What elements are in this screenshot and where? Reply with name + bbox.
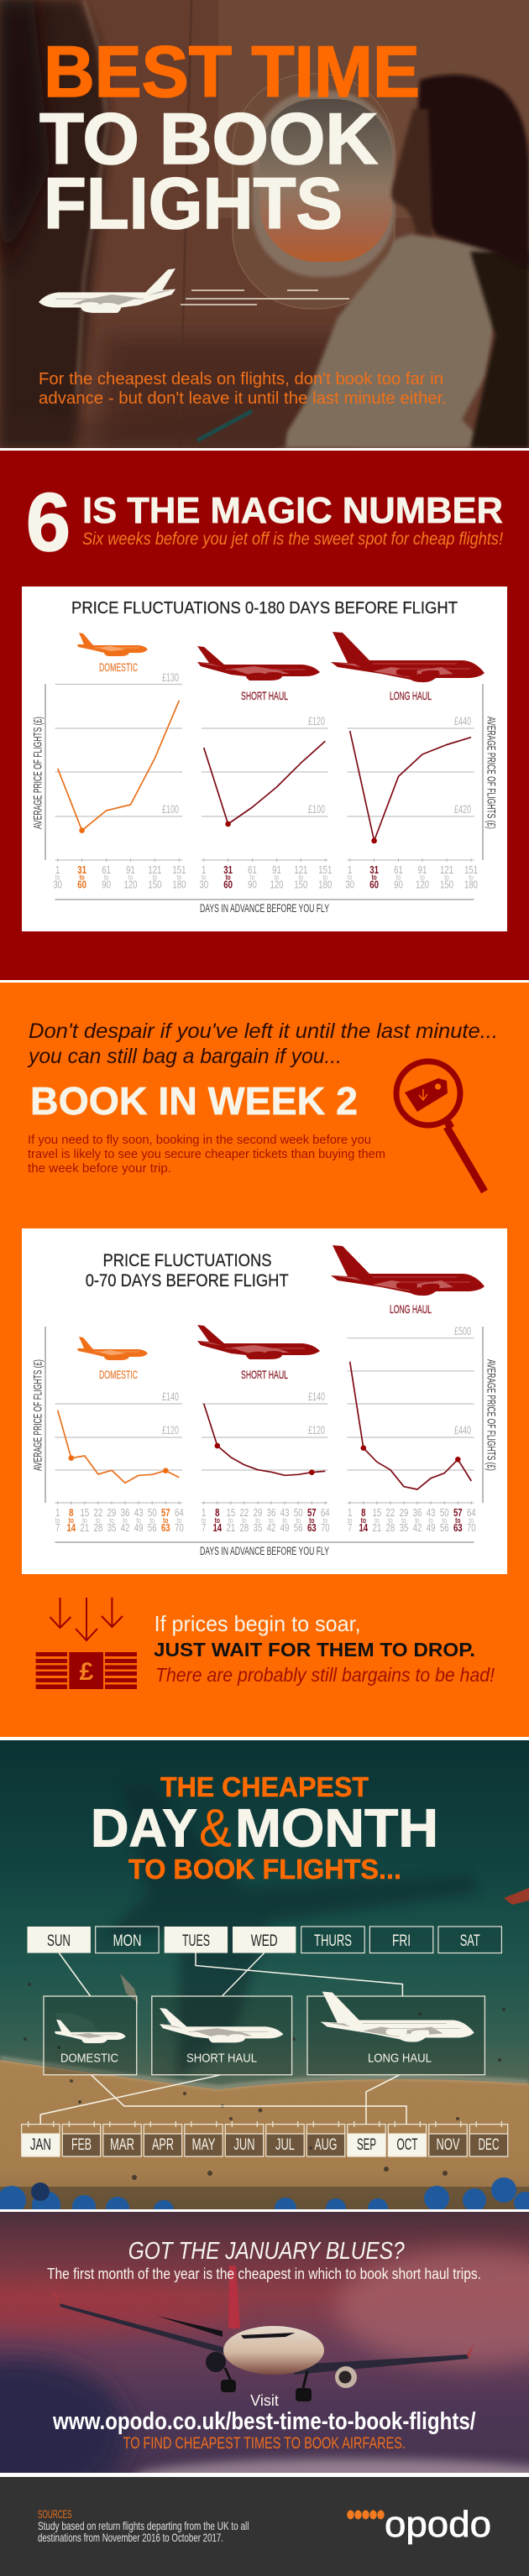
domestic line chart: to — [82, 1516, 87, 1525]
domestic line chart: £140 — [162, 1390, 179, 1403]
short haul line chart: to — [202, 873, 207, 882]
short haul line chart: to — [275, 873, 280, 882]
long haul line chart: to — [469, 873, 474, 882]
icon: speed lines — [181, 290, 349, 305]
long haul line chart: 14 — [359, 1523, 369, 1534]
lead-in text: Don't despair if you've left it until the last minute... — [29, 1019, 498, 1043]
panel: 0-70 day chart — [22, 1228, 507, 1574]
heading: GOT THE JANUARY BLUES? — [128, 2238, 405, 2265]
long haul line chart: 120 — [416, 879, 429, 891]
long haul line chart: 150 — [440, 879, 453, 891]
domestic box: DOMESTIC — [60, 2051, 118, 2065]
domestic line chart: to — [177, 873, 182, 882]
heading: TO BOOK FLIGHTS... — [128, 1854, 401, 1885]
domestic line chart: 8 — [69, 1508, 73, 1519]
short haul line chart: 28 — [240, 1523, 249, 1534]
long haul line chart: £500 — [454, 1325, 471, 1338]
short haul line chart: 43 — [280, 1508, 289, 1519]
domestic line chart: 120 — [123, 879, 138, 891]
domestic line chart: 43 — [134, 1508, 143, 1519]
calendar months: NOV — [437, 2136, 460, 2154]
long haul line chart: 30 — [345, 879, 354, 891]
body text — [28, 1133, 385, 1176]
calendar months: FEB — [71, 2136, 92, 2154]
domestic plane — [77, 1337, 148, 1360]
short haul line chart: 29 — [254, 1508, 262, 1519]
long haul line chart: 42 — [413, 1523, 422, 1534]
title: TO BOOK — [39, 99, 378, 180]
short haul line chart: to — [282, 1516, 287, 1525]
domestic line chart: 90 — [102, 879, 111, 891]
sources: SOURCES — [38, 2507, 72, 2521]
heading — [91, 1771, 438, 1885]
domestic line chart: 56 — [148, 1523, 157, 1534]
axes and axis titles: AVERAGE PRICE OF FLIGHTS (£) — [485, 1359, 497, 1471]
short haul line chart: 30 — [199, 879, 208, 891]
domestic line chart: 29 — [107, 1508, 116, 1519]
short haul line chart: to — [323, 873, 328, 882]
days of the week: TUES — [182, 1932, 210, 1950]
icon: white plane — [39, 269, 175, 313]
domestic line chart: 22 — [94, 1508, 102, 1519]
calendar months — [22, 2121, 508, 2156]
long haul line chart: 7 — [348, 1523, 352, 1534]
long haul line chart: 49 — [427, 1523, 435, 1534]
long haul line chart — [348, 1325, 476, 1534]
long haul line chart: to — [420, 873, 425, 882]
sources: Study based on return flights departing from the UK to all — [38, 2519, 249, 2532]
domestic line chart: 42 — [121, 1523, 129, 1534]
long haul line chart: to — [455, 1516, 461, 1525]
advice text — [154, 1611, 495, 1686]
long haul line chart: to — [428, 1516, 433, 1525]
short haul line chart: 61 — [248, 865, 257, 876]
long haul line chart: 29 — [400, 1508, 408, 1519]
long haul plane — [331, 632, 484, 682]
panel: january blues — [0, 2212, 529, 2473]
short haul line chart: 180 — [318, 879, 332, 891]
domestic line chart: 50 — [148, 1508, 157, 1519]
short haul line chart: £100 — [308, 803, 325, 816]
axes and axis titles: DAYS IN ADVANCE BEFORE YOU FLY — [200, 1545, 329, 1557]
domestic line chart: to — [123, 1516, 128, 1525]
long haul line chart: 64 — [467, 1508, 476, 1519]
days of the week: SAT — [460, 1932, 480, 1950]
short haul line chart: 8 — [215, 1508, 219, 1519]
short haul line chart: £140 — [308, 1390, 325, 1403]
long haul line chart: 121 — [440, 865, 453, 876]
advice text: There are probably still bargains to be had! — [155, 1664, 495, 1686]
domestic line chart: 91 — [126, 865, 135, 876]
body text: the week before your trip. — [28, 1161, 171, 1176]
short haul line chart: to — [242, 1516, 247, 1525]
long haul line chart: 70 — [467, 1523, 476, 1534]
long haul line chart: £440 — [454, 1424, 471, 1437]
calendar months: DEC — [479, 2136, 499, 2154]
domestic line chart: to — [55, 1516, 60, 1525]
domestic line chart: 36 — [121, 1508, 129, 1519]
domestic line chart: to — [149, 1516, 155, 1525]
axes and axis titles: AVERAGE PRICE OF FLIGHTS (£) — [485, 717, 497, 829]
domestic line chart: to — [104, 873, 109, 882]
long haul line chart: to — [444, 873, 449, 882]
icon: falling prices: £ — [80, 1658, 94, 1686]
long haul line chart: to — [388, 1516, 393, 1525]
short haul plane — [197, 646, 320, 681]
short haul line chart: 121 — [294, 865, 307, 876]
short haul line chart: to — [299, 873, 304, 882]
intro text — [39, 370, 447, 408]
short haul line chart: 22 — [240, 1508, 249, 1519]
long haul line chart: to — [442, 1516, 447, 1525]
short haul line chart — [199, 715, 332, 891]
domestic line chart: 31 — [77, 865, 86, 876]
long haul line chart: 15 — [373, 1508, 381, 1519]
axes and axis titles: DAYS IN ADVANCE BEFORE YOU FLY — [200, 902, 329, 915]
long haul line chart: to — [396, 873, 401, 882]
domestic line chart: 49 — [134, 1523, 143, 1534]
panel: footer — [0, 2473, 529, 2576]
long haul line chart: to — [361, 1516, 366, 1525]
short haul line chart: 14 — [212, 1523, 223, 1534]
domestic label: DOMESTIC — [99, 1368, 138, 1381]
long haul line chart: 151 — [464, 865, 478, 876]
domestic line chart: £130 — [162, 671, 179, 684]
domestic line chart: to — [163, 1516, 169, 1525]
domestic line chart: to — [69, 1516, 74, 1525]
calendar months: SEP — [357, 2136, 376, 2154]
axes and axis titles: AVERAGE PRICE OF FLIGHTS (£) — [32, 717, 44, 829]
long haul line chart: 180 — [464, 879, 478, 891]
days of the week: WED — [251, 1932, 278, 1950]
intro text: For the cheapest deals on flights, don't book too far in — [39, 370, 443, 388]
long haul box: LONG HAUL — [368, 2051, 432, 2065]
long haul line chart: 91 — [418, 865, 427, 876]
heading: DAY — [91, 1798, 197, 1859]
short haul line chart: 57 — [307, 1508, 317, 1519]
logo: opodo: opodo — [385, 2504, 491, 2545]
axes and axis titles: AVERAGE PRICE OF FLIGHTS (£) — [32, 1359, 44, 1471]
domestic line chart: 1 — [55, 865, 60, 876]
short haul line chart: to — [228, 1516, 233, 1525]
short haul line chart: 63 — [307, 1523, 317, 1534]
short haul line chart: 35 — [254, 1523, 262, 1534]
long haul line chart: to — [348, 873, 353, 882]
domestic line chart: £100 — [162, 803, 179, 816]
short haul box — [152, 1996, 292, 2075]
long haul line chart: to — [415, 1516, 420, 1525]
domestic line chart: 180 — [172, 879, 186, 891]
domestic plane — [77, 633, 148, 656]
short haul line chart: £120 — [308, 1424, 325, 1437]
short haul line chart: to — [225, 873, 231, 882]
domestic line chart: 14 — [66, 1523, 76, 1534]
domestic line chart: to — [153, 873, 158, 882]
domestic line chart: 28 — [94, 1523, 102, 1534]
long haul line chart: 31 — [369, 865, 379, 876]
short haul line chart: to — [296, 1516, 301, 1525]
domestic line chart: 61 — [102, 865, 111, 876]
panel: six is the magic number — [0, 451, 529, 980]
long haul line chart: to — [371, 873, 377, 882]
short haul box: SHORT HAUL — [186, 2051, 257, 2065]
short haul line chart: 56 — [294, 1523, 303, 1534]
domestic line chart: £120 — [162, 1424, 179, 1437]
panel: hero — [0, 0, 529, 448]
domestic line chart: 35 — [107, 1523, 116, 1534]
advice text: If prices begin to soar, — [155, 1611, 361, 1636]
domestic line chart: 57 — [161, 1508, 170, 1519]
domestic line chart: to — [79, 873, 85, 882]
long haul line chart: to — [374, 1516, 380, 1525]
domestic line chart: 60 — [77, 879, 86, 891]
title — [39, 32, 420, 244]
short haul line chart — [202, 1390, 330, 1534]
long haul line chart — [345, 715, 478, 891]
short haul line chart: to — [269, 1516, 274, 1525]
domestic line chart: to — [128, 873, 134, 882]
short haul line chart: 31 — [223, 865, 233, 876]
short haul line chart: 50 — [294, 1508, 303, 1519]
long haul line chart: 36 — [413, 1508, 422, 1519]
chart title: PRICE FLUCTUATIONS 0-180 DAYS BEFORE FLIGHT — [71, 599, 458, 618]
days of the week: THURS — [314, 1932, 352, 1950]
short haul line chart: 151 — [318, 865, 332, 876]
short haul line chart: 21 — [227, 1523, 235, 1534]
long haul line chart: 56 — [440, 1523, 449, 1534]
heading: THE CHEAPEST — [160, 1771, 369, 1802]
domestic line chart: to — [136, 1516, 141, 1525]
domestic line chart: 63 — [161, 1523, 170, 1534]
long haul line chart: 90 — [394, 879, 403, 891]
heading: IS THE MAGIC NUMBER — [82, 490, 503, 531]
domestic line chart: 21 — [81, 1523, 89, 1534]
days of the week: FRI — [392, 1932, 411, 1950]
short haul line chart: 60 — [223, 879, 233, 891]
short haul label: SHORT HAUL — [241, 689, 288, 702]
long haul line chart: 63 — [453, 1523, 463, 1534]
calendar months: AUG — [314, 2136, 338, 2154]
long haul line chart: 22 — [386, 1508, 395, 1519]
long haul line chart: 1 — [348, 1508, 352, 1519]
long haul line chart: 8 — [361, 1508, 365, 1519]
long haul box — [307, 1992, 484, 2075]
short haul line chart: to — [323, 1516, 328, 1525]
chart title: 0-70 DAYS BEFORE FLIGHT — [86, 1271, 289, 1291]
calendar months: MAY — [191, 2136, 216, 2154]
calendar months: OCT — [396, 2136, 418, 2154]
domestic line chart: to — [109, 1516, 114, 1525]
short haul line chart: 120 — [270, 879, 284, 891]
domestic line chart — [55, 1390, 184, 1534]
days of the week — [27, 1927, 501, 1953]
days of the week: MON — [113, 1932, 141, 1950]
connector lines — [40, 1953, 406, 2125]
short haul line chart: 90 — [248, 879, 257, 891]
long haul line chart: to — [348, 1516, 353, 1525]
sources — [38, 2507, 249, 2544]
calendar months: MAR — [110, 2136, 134, 2154]
domestic line chart: to — [96, 1516, 101, 1525]
long haul line chart: to — [469, 1516, 474, 1525]
panel: 0-180 day chart — [22, 587, 507, 931]
domestic line chart: 70 — [175, 1523, 184, 1534]
domestic line chart: 7 — [55, 1523, 60, 1534]
short haul line chart: 70 — [321, 1523, 330, 1534]
heading: MONTH — [235, 1798, 438, 1859]
heading: & — [199, 1798, 232, 1859]
body text: If you need to fly soon, booking in the second week before you — [28, 1133, 371, 1147]
long haul line chart: 28 — [386, 1523, 395, 1534]
call to action: TO FIND CHEAPEST TIMES TO BOOK AIRFARES. — [123, 2435, 406, 2453]
icon: magnifying glass with price tag — [396, 1061, 484, 1192]
icon: falling prices — [36, 1598, 137, 1689]
long haul line chart: 43 — [427, 1508, 435, 1519]
long haul line chart: 61 — [394, 865, 403, 876]
domestic line chart — [53, 671, 186, 891]
days of the week: SUN — [47, 1932, 71, 1950]
long haul line chart: 57 — [453, 1508, 463, 1519]
short haul line chart: 7 — [202, 1523, 206, 1534]
visit text: Visit — [250, 2392, 279, 2409]
long haul label: LONG HAUL — [390, 1302, 432, 1316]
domestic box — [44, 1996, 137, 2075]
body text: travel is likely to see you secure cheaper tickets than buying them — [28, 1147, 385, 1161]
panel: cheapest day and month — [0, 1737, 529, 2220]
short haul plane — [197, 1325, 320, 1359]
domestic line chart: 1 — [55, 1508, 60, 1519]
domestic line chart: 15 — [81, 1508, 89, 1519]
lead-in text — [27, 1019, 498, 1068]
short haul line chart: 1 — [202, 1508, 206, 1519]
short haul line chart: 64 — [321, 1508, 330, 1519]
title: FLIGHTS — [44, 164, 343, 244]
short haul line chart: 49 — [280, 1523, 289, 1534]
short haul line chart: to — [255, 1516, 260, 1525]
domestic line chart: to — [55, 873, 60, 882]
heading: BOOK IN WEEK 2 — [30, 1079, 358, 1123]
calendar months: JAN — [30, 2136, 51, 2154]
domestic line chart: 151 — [172, 865, 186, 876]
short haul label: SHORT HAUL — [241, 1368, 288, 1381]
short haul line chart: to — [215, 1516, 220, 1525]
long haul line chart: £420 — [454, 803, 471, 816]
advice text: JUST WAIT FOR THEM TO DROP. — [154, 1639, 475, 1661]
domestic line chart: 121 — [148, 865, 161, 876]
long haul label: LONG HAUL — [390, 689, 432, 702]
long haul plane — [331, 1245, 484, 1296]
long haul line chart: to — [401, 1516, 406, 1525]
calendar months: JUN — [233, 2136, 255, 2154]
sources: destinations from November 2016 to October 2017. — [38, 2531, 223, 2544]
short haul line chart: 91 — [272, 865, 281, 876]
domestic line chart: 150 — [148, 879, 161, 891]
panel: book in week 2 — [0, 980, 529, 1737]
short haul line chart: £120 — [308, 715, 325, 727]
short haul line chart: 42 — [267, 1523, 275, 1534]
short haul line chart: to — [309, 1516, 315, 1525]
domestic line chart: 64 — [175, 1508, 184, 1519]
long haul line chart: 35 — [400, 1523, 408, 1534]
axes and axis titles — [32, 1327, 497, 1557]
lead-in text: you can still bag a bargain if you... — [27, 1045, 342, 1068]
long haul line chart: 21 — [373, 1523, 381, 1534]
domestic label: DOMESTIC — [99, 660, 138, 674]
calendar months: JUL — [275, 2136, 295, 2154]
long haul line chart: £440 — [454, 715, 471, 727]
short haul line chart: 36 — [267, 1508, 275, 1519]
short haul line chart: 150 — [294, 879, 307, 891]
short haul line chart: 15 — [227, 1508, 235, 1519]
long haul line chart: 1 — [348, 865, 352, 876]
domestic line chart: to — [177, 1516, 182, 1525]
short haul line chart: 1 — [202, 865, 206, 876]
short haul line chart: to — [250, 873, 255, 882]
axes and axis titles — [32, 684, 497, 915]
long haul line chart: 60 — [369, 879, 379, 891]
long haul line chart: 50 — [440, 1508, 449, 1519]
chart title — [86, 1251, 289, 1291]
intro text: advance - but don't leave it until the last minute either. — [39, 389, 447, 408]
short haul line chart: to — [202, 1516, 207, 1525]
big number six: 6 — [26, 476, 71, 568]
calendar months: APR — [152, 2136, 174, 2154]
title: BEST TIME — [44, 32, 420, 112]
chart title: PRICE FLUCTUATIONS — [102, 1251, 272, 1270]
domestic line chart: 30 — [53, 879, 62, 891]
